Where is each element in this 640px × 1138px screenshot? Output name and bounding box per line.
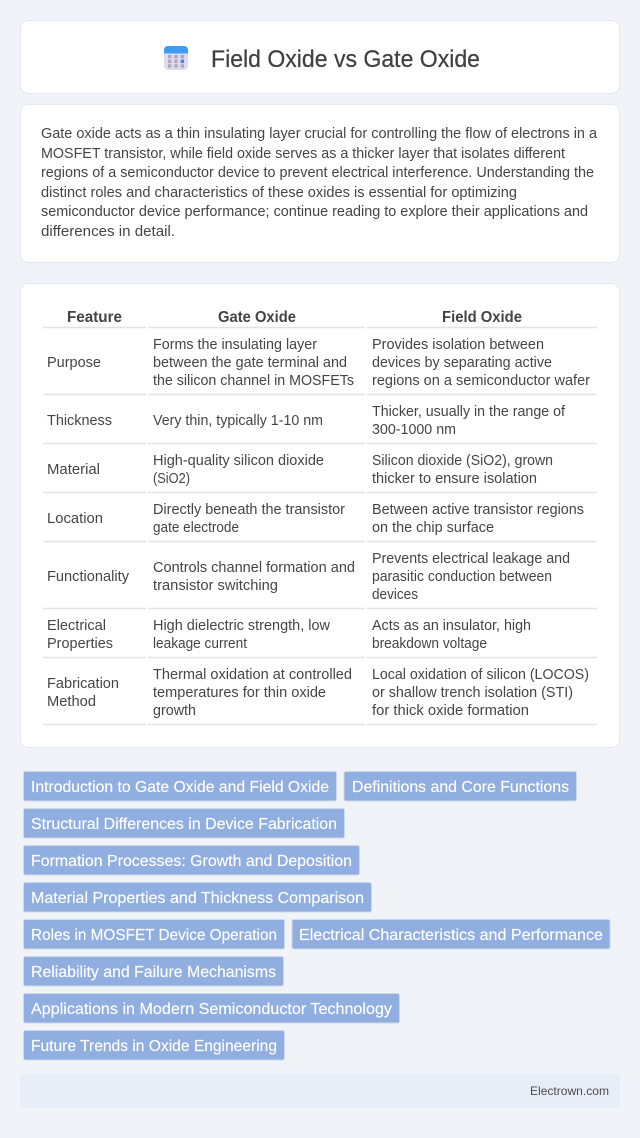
table row: material	[47, 453, 553, 487]
table row: functionality: devices	[372, 587, 418, 603]
table row: fabrication method: or shallow trench isolation (STI)	[372, 685, 573, 701]
text block: introduction: MOSFET transistor, while field oxide serves as a thicker layer that isolates different	[41, 146, 565, 162]
text block: introduction: regions of a semiconductor device to prevent electrical interference. Understanding the	[41, 165, 594, 181]
tag: roles in MOSFET: Roles in MOSFET Device Operation	[31, 927, 277, 944]
table row: purpose: Provides isolation between	[372, 337, 544, 353]
topic tags	[24, 772, 610, 1060]
tag: future trends	[24, 1030, 284, 1060]
table row: material: thicker to ensure isolation	[372, 471, 537, 487]
panel: title header	[20, 20, 620, 94]
footer	[20, 1074, 620, 1108]
table row: purpose: Forms the insulating layer	[153, 337, 317, 353]
table row: electrical properties	[47, 618, 531, 652]
table row: fabrication method: growth	[153, 703, 196, 719]
tag: introduction: Introduction to Gate Oxide and Field Oxide	[31, 779, 329, 796]
footer source text: Electrown.com	[530, 1084, 609, 1098]
text block: introduction	[41, 126, 597, 240]
text block: introduction: Gate oxide acts as a thin insulating layer crucial for controlling the flow of electrons in a	[41, 126, 597, 142]
text block: introduction: differences in detail.	[41, 224, 175, 240]
table row: functionality: Prevents electrical leakage and	[372, 551, 570, 567]
tag: roles in MOSFET	[24, 920, 284, 949]
table row: purpose: the silicon channel in MOSFETs	[153, 373, 354, 389]
table row: location	[47, 502, 584, 536]
title: Field Oxide vs Gate Oxide	[211, 46, 480, 73]
table row: purpose: Purpose	[47, 355, 101, 371]
table row: functionality: Functionality	[47, 569, 130, 585]
tag: applications	[24, 994, 400, 1023]
tag: reliability: Reliability and Failure Mechanisms	[31, 964, 276, 981]
table row: thickness: 300-1000 nm	[372, 422, 456, 438]
tag: future trends: Future Trends in Oxide Engineering	[31, 1038, 277, 1055]
tag: definitions: Definitions and Core Functions	[352, 779, 569, 796]
table row: functionality	[47, 551, 570, 603]
tag: electrical characteristics	[292, 920, 610, 949]
table row: electrical properties: High dielectric strength, low	[153, 618, 331, 634]
table row: electrical properties: Electrical	[47, 618, 106, 634]
tag: definitions	[344, 772, 576, 801]
table header: Feature	[67, 309, 122, 326]
table row: material: High-quality silicon dioxide	[153, 453, 324, 469]
table row: electrical properties: leakage current	[153, 636, 247, 652]
table row: material: Material	[47, 462, 100, 478]
table row: location: Between active transistor regions	[372, 502, 584, 518]
tag: applications: Applications in Modern Semiconductor Technology	[31, 1001, 392, 1018]
table row: functionality: transistor switching	[153, 578, 278, 594]
table header: Gate Oxide	[218, 309, 296, 326]
table row: material: (SiO2)	[153, 471, 190, 487]
panel: comparison table	[20, 284, 620, 748]
table header	[67, 309, 522, 326]
table row: fabrication method: Local oxidation of silicon (LOCOS)	[372, 667, 589, 683]
tag: material properties: Material Properties and Thickness Comparison	[31, 890, 364, 907]
table row: purpose: regions on a semiconductor wafer	[372, 373, 590, 389]
table row: fabrication method: Fabrication	[47, 676, 119, 692]
table row: location: gate electrode	[153, 520, 239, 536]
table row: thickness: Thicker, usually in the range of	[372, 404, 565, 420]
table row: location: on the chip surface	[372, 520, 494, 536]
table row: functionality: parasitic conduction between	[372, 569, 552, 585]
table row: thickness	[47, 404, 565, 438]
table row: thickness: Very thin, typically 1-10 nm	[153, 413, 323, 429]
table row: purpose: between the gate terminal and	[153, 355, 347, 371]
tag: structural differences	[24, 808, 344, 838]
table row: purpose	[47, 337, 590, 389]
tag: formation processes: Formation Processes: Growth and Deposition	[31, 853, 352, 870]
text block: introduction: distinct roles and characteristics of these oxides is essential for optimizing	[41, 185, 517, 201]
tag: electrical characteristics: Electrical Characteristics and Performance	[299, 927, 603, 944]
table row: location: Location	[47, 511, 103, 527]
panel: introduction paragraph	[20, 104, 620, 262]
table row: fabrication method	[47, 667, 589, 719]
table row: purpose: devices by separating active	[372, 355, 552, 371]
table header: Field Oxide	[442, 309, 522, 326]
tag: introduction	[24, 772, 336, 801]
tag: material properties	[24, 882, 372, 912]
table row: fabrication method: Thermal oxidation at controlled	[153, 667, 352, 683]
table row: material: Silicon dioxide (SiO2), grown	[372, 453, 553, 469]
icon: calendar grid	[164, 46, 188, 70]
table row: functionality: Controls channel formation and	[153, 560, 355, 576]
table row: electrical properties: breakdown voltage	[372, 636, 487, 652]
tag: reliability	[24, 956, 284, 986]
table row: fabrication method: Method	[47, 694, 96, 710]
table row: electrical properties: Properties	[47, 636, 113, 652]
table row: electrical properties: Acts as an insulator, high	[372, 618, 531, 634]
table row: fabrication method: for thick oxide formation	[372, 703, 529, 719]
tag: formation processes	[24, 846, 360, 875]
table row: location: Directly beneath the transistor	[153, 502, 345, 518]
tag: structural differences: Structural Differences in Device Fabrication	[31, 816, 337, 833]
table row: fabrication method: temperatures for thin oxide	[153, 685, 326, 701]
table row: thickness: Thickness	[47, 413, 112, 429]
text block: introduction: semiconductor device performance; continue reading to explore their applications and	[41, 204, 588, 220]
